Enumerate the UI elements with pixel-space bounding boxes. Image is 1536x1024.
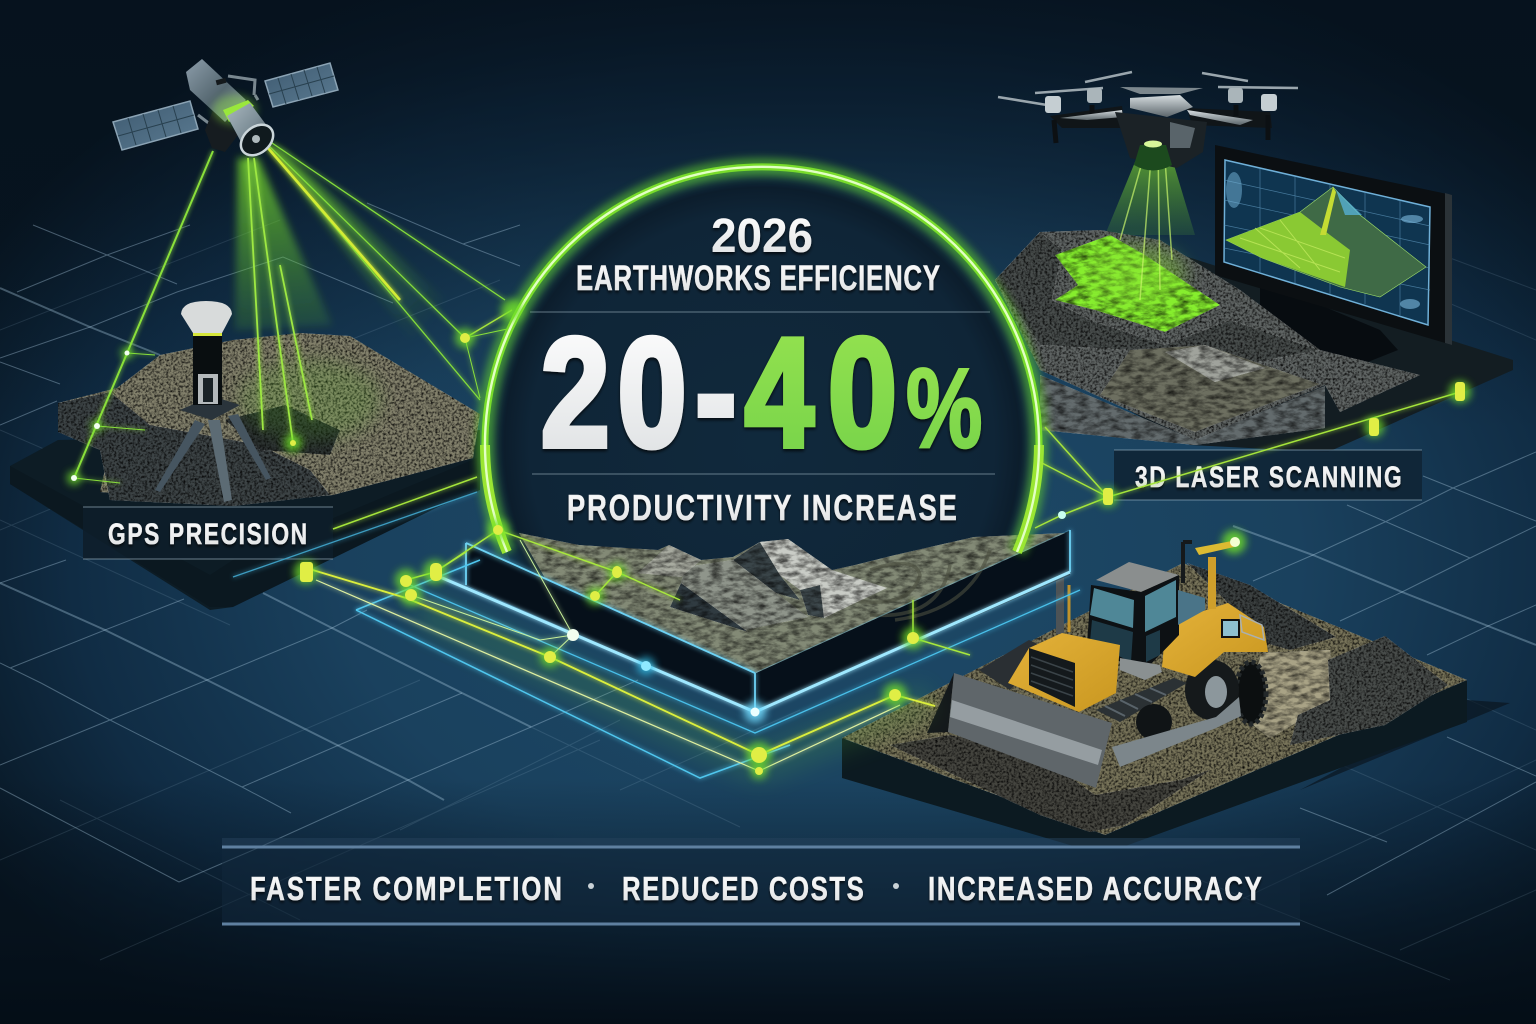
icon: monitor [1215, 145, 1452, 345]
title: EARTHWORKS EFFICIENCY [576, 258, 940, 298]
bottom benefits strip [222, 838, 1300, 924]
slab [1040, 245, 1513, 452]
hill [995, 230, 1420, 440]
exhaust stacks [1056, 577, 1064, 634]
mountain mid slab [681, 560, 808, 630]
headline stat: % [906, 346, 982, 472]
panel: central terrain platform [466, 530, 1070, 712]
engine hood [1008, 633, 1120, 712]
blade [927, 673, 954, 733]
soil mound [58, 333, 480, 503]
satellite beam lines [74, 143, 512, 483]
terrain surface [519, 533, 1065, 673]
monitor stand [1260, 280, 1398, 375]
solar panel right [265, 63, 338, 107]
label: GPS precision [83, 507, 333, 559]
green reflected glow [240, 360, 380, 440]
cyan circuit lines [356, 560, 1080, 778]
icon: bulldozer [927, 530, 1268, 788]
label: 3D laser scanning [1114, 450, 1422, 500]
slab [10, 430, 480, 610]
soil pile: front [890, 735, 1210, 832]
satellite beams [235, 145, 445, 340]
badge disc [488, 182, 1036, 578]
dark soil foreground [58, 392, 330, 506]
soil pile: right [1290, 636, 1448, 745]
radiator grille [1029, 648, 1075, 707]
scanned green patch [1055, 235, 1220, 332]
soil surface [842, 563, 1467, 835]
dark rubble [225, 405, 340, 455]
label: GPS precision: GPS PRECISION [108, 517, 307, 551]
rear yellow body [1162, 603, 1268, 677]
connector network [233, 310, 1460, 778]
yellow-green circuit lines [233, 310, 1460, 771]
front track [1096, 678, 1187, 722]
connector nodes [67, 299, 1471, 779]
push arm [1112, 697, 1241, 767]
sensor mast and lamp [1181, 542, 1185, 583]
panel: bulldozer platform [842, 563, 1510, 848]
divider bottom [532, 473, 995, 475]
slab shadow [1300, 700, 1510, 790]
light rock patch [1165, 345, 1265, 382]
divider top [530, 311, 990, 313]
panel: laser scanning platform [995, 145, 1513, 452]
platform front faces [466, 530, 1070, 712]
solar panel left [113, 101, 198, 150]
shadowed rock base [670, 583, 748, 632]
icon: drone [998, 72, 1298, 170]
panel: GPS precision platform [10, 333, 480, 610]
dark rock ridge [995, 232, 1320, 365]
benefit: reduced costs: REDUCED COSTS [622, 871, 864, 908]
cab [1096, 562, 1179, 592]
platform cyan edges [466, 530, 1070, 712]
label: 3D laser scanning: 3D LASER SCANNING [1135, 460, 1402, 494]
benefit: faster completion: FASTER COMPLETION [250, 871, 562, 908]
excavated cut [1100, 345, 1320, 432]
headline stat: 40 [745, 306, 897, 479]
rock block front [1040, 375, 1325, 445]
rear tires [1236, 662, 1266, 724]
track rear [979, 640, 1050, 690]
small peak [638, 545, 701, 577]
right peak shadow [800, 585, 824, 618]
graded tracks [1240, 650, 1335, 738]
curved excavation [850, 550, 990, 620]
icon: GPS receiver on tripod [155, 301, 271, 502]
mountain dark face [733, 542, 800, 600]
slab [842, 680, 1467, 848]
badge ring [485, 167, 1039, 552]
green floor glow [420, 610, 930, 765]
central badge [488, 182, 1036, 578]
subtitle: PRODUCTIVITY INCREASE [567, 487, 957, 528]
icon: satellite [113, 59, 338, 162]
title year: 2026 [711, 210, 813, 263]
drone laser cone [1105, 145, 1195, 235]
benefit: increased accuracy: INCREASED ACCURACY [928, 871, 1262, 908]
isometric floor grid [0, 203, 1536, 980]
headline stat [541, 306, 982, 479]
headline stat: 20- [541, 306, 737, 479]
soil pile: rear [1187, 563, 1336, 650]
mountain light face [760, 539, 887, 618]
